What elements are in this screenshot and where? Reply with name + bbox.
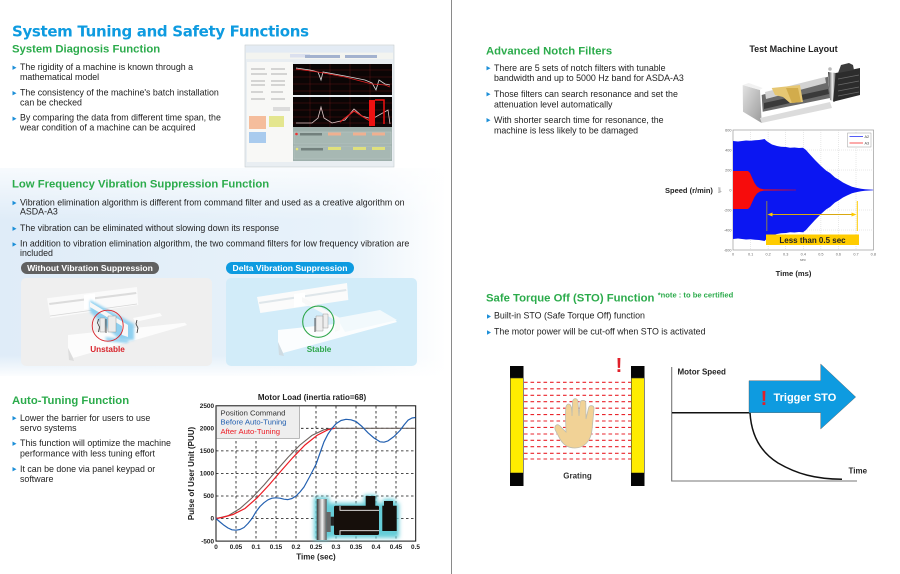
x axis labels: 0 <box>214 544 218 551</box>
note: to be certified: *note : to be certified <box>658 291 734 300</box>
y axis title: speed: Speed (r/min) <box>665 186 713 195</box>
chart legend: A3 <box>864 142 869 146</box>
x axis title: Time (sec) <box>296 552 336 562</box>
software screenshot <box>245 45 394 167</box>
left post <box>510 366 524 486</box>
warning mark: ! <box>616 355 622 377</box>
x axis labels: 0.1 <box>252 544 261 551</box>
label: motor speed: Motor Speed <box>678 368 726 376</box>
label: stable: Stable <box>307 345 332 354</box>
x axis labels: 0.05 <box>230 544 243 551</box>
speed line <box>672 413 842 479</box>
chart legend <box>848 133 871 147</box>
line chart: speed response <box>718 128 876 262</box>
chart: motor speed after sto <box>672 364 868 481</box>
bullet list: notch filters: With shorter search time for resonance, the <box>494 115 664 125</box>
y axis labels: -500 <box>201 538 214 545</box>
chart x axis labels: 0.6 <box>836 252 841 256</box>
bullet list: sto: Built-in STO (Safe Torque Off) function <box>494 311 645 321</box>
y axis labels: 1500 <box>200 448 214 455</box>
panel: system diagnosis <box>12 44 394 167</box>
label: grating: Grating <box>563 472 592 480</box>
bullet list: low frequency: The vibration can be eliminated without slowing down its response <box>20 223 279 233</box>
heading: auto-tuning: Auto-Tuning Function <box>12 395 129 407</box>
light beams <box>524 382 631 459</box>
chart y axis labels <box>724 128 732 252</box>
label: without vibration suppression: Without Vibration Suppression <box>27 263 153 273</box>
icon: hand <box>555 399 594 448</box>
callout: settling time arrow <box>767 201 857 231</box>
bullet list: notch filters: Those filters can search resonance and set the <box>494 89 678 99</box>
diagram: grating <box>510 355 644 486</box>
bullet list: sto <box>487 311 706 337</box>
x axis labels: 0.25 <box>310 544 323 551</box>
chart title: Motor Load (inertia ratio=68) <box>258 393 366 402</box>
x axis labels: 0.45 <box>390 544 403 551</box>
label: unstable: Unstable <box>90 345 125 354</box>
chart x axis labels: sec <box>800 258 806 262</box>
chart x axis labels: rpm <box>718 187 722 193</box>
screenshot status panel <box>293 127 392 161</box>
waveform: A2 <box>733 139 873 241</box>
bullet list: auto-tuning: servo systems <box>20 423 77 433</box>
chart x axis labels: 0.3 <box>783 252 788 256</box>
screenshot chart: phase <box>293 97 392 127</box>
bullet list: low frequency <box>12 197 409 258</box>
bullet list: auto-tuning: performance with less tuning effort <box>20 448 156 458</box>
label: delta vibration suppression: Delta Vibration Suppression <box>233 263 347 273</box>
bullet list: low frequency: included <box>20 248 53 258</box>
chart legend: Position Command <box>220 408 285 418</box>
y axis labels: 1000 <box>200 471 214 478</box>
chart x axis labels: 0 <box>732 252 734 256</box>
chart x axis labels <box>718 187 876 262</box>
bullet list: system diagnosis: wear condition of a machine can be acquired <box>19 123 196 133</box>
y axis labels: 500 <box>203 493 214 500</box>
title: System Tuning and Safety Functions <box>12 22 309 40</box>
arrow: trigger sto: Trigger STO <box>774 392 837 404</box>
chart x axis labels: 0.8 <box>871 252 876 256</box>
y axis labels <box>200 403 214 545</box>
arrow: trigger sto <box>749 364 856 429</box>
bullet list: low frequency: In addition to vibration elimination algorithm, the two command filters for low frequency vibration are <box>20 239 409 249</box>
bullet list: system diagnosis: mathematical model <box>20 72 99 82</box>
bullet list: notch filters: machine is less likely to be damaged <box>494 126 638 136</box>
bullet list: low frequency: ASDA-A3 <box>20 207 58 217</box>
chart x axis labels: 0.2 <box>765 252 771 256</box>
bullet list: system diagnosis: The consistency of the machine's batch installation <box>20 87 219 97</box>
y axis labels: 2000 <box>200 426 214 432</box>
chart y axis labels: -200 <box>724 208 732 212</box>
bullet list: auto-tuning: This function will optimize the machine <box>20 438 171 448</box>
icon: servo motor <box>314 495 399 540</box>
heading: system diagnosis: System Diagnosis Function <box>12 44 160 56</box>
heading: safe torque off: Safe Torque Off (STO) Function <box>486 293 654 305</box>
bullet list: auto-tuning: Lower the barrier for users to use <box>20 413 150 423</box>
right post <box>631 366 644 486</box>
heading: advanced notch filters: Advanced Notch Filters <box>486 46 612 58</box>
bullet list: low frequency: Vibration elimination algorithm is different from command filter and used as a creative algorithm on <box>20 197 405 207</box>
chart legend: After Auto-Tuning <box>220 427 280 436</box>
chart y axis labels: 400 <box>725 148 732 152</box>
bullet list: system diagnosis: can be checked <box>20 97 82 107</box>
bullet list: notch filters: attenuation level automatically <box>494 100 613 110</box>
x axis labels: 0.3 <box>332 544 341 551</box>
circle: unstable highlight <box>92 310 123 341</box>
waveform: A3 <box>733 171 796 209</box>
bullet list: auto-tuning <box>12 413 171 484</box>
bullet list: system diagnosis: By comparing the data from different time span, the <box>20 113 221 123</box>
chart y axis labels: 200 <box>725 168 732 172</box>
bullet list: system diagnosis: The rigidity of a machine is known through a <box>20 62 193 72</box>
arrow: trigger sto: ! <box>761 388 767 410</box>
curve: after auto-tuning <box>216 428 335 518</box>
panel: stable machine <box>226 278 417 366</box>
chart y axis labels: 0 <box>729 188 732 192</box>
curve: position command <box>216 428 416 518</box>
x axis labels: 0.5 <box>411 544 420 551</box>
x axis labels: 0.35 <box>350 544 363 551</box>
y axis labels: 2500 <box>200 403 214 410</box>
panel: safe torque off <box>486 291 868 486</box>
heading: test machine layout: Test Machine Layout <box>749 44 838 54</box>
x axis labels <box>214 544 420 551</box>
chart x axis labels: 0.1 <box>748 252 753 256</box>
chart y axis labels: -600 <box>724 248 732 252</box>
page divider <box>450 0 452 574</box>
chart x axis labels: 0.5 <box>818 252 824 256</box>
illustration: test machine <box>743 63 860 123</box>
bullet list: system diagnosis <box>12 62 221 133</box>
chart x axis labels: 0.7 <box>853 252 859 256</box>
x axis labels: 0.4 <box>372 544 381 551</box>
circle: stable highlight <box>303 306 334 337</box>
machine illustration: unstable <box>47 287 187 361</box>
y axis labels: 0 <box>210 516 214 523</box>
panel: unstable machine <box>21 278 212 366</box>
x axis title: time: Time (ms) <box>776 269 812 278</box>
panel: auto-tuning <box>12 393 420 562</box>
panel: advanced notch filters <box>486 44 876 278</box>
bullet list: sto: The motor power will be cut-off when STO is activated <box>494 327 706 337</box>
chart legend: A2 <box>864 135 869 139</box>
callout: less than 0.5 sec: Less than 0.5 sec <box>779 236 846 245</box>
screenshot chart: magnitude <box>293 64 392 95</box>
y axis title: Pulse of User Unit (PUU) <box>187 426 196 520</box>
curve: before auto-tuning <box>216 418 416 530</box>
panel: low frequency vibration suppression <box>12 179 417 366</box>
callout: less than 0.5 sec <box>766 234 859 245</box>
heading: low frequency: Low Frequency Vibration Suppression Function <box>12 179 269 191</box>
chart legend <box>216 406 300 438</box>
bullet list: auto-tuning: software <box>20 474 54 484</box>
bullet list: notch filters: bandwidth and up to 5000 Hz band for ASDA-A3 <box>494 73 684 83</box>
chart x axis labels: 0.4 <box>801 252 806 256</box>
chart legend: Before Auto-Tuning <box>220 418 286 426</box>
machine illustration: stable <box>257 283 397 356</box>
chart y axis labels: -400 <box>724 228 732 232</box>
label: time: Time <box>848 466 868 476</box>
x axis labels: 0.2 <box>292 544 301 551</box>
bullet list: auto-tuning: It can be done via panel keypad or <box>20 464 155 474</box>
panel background: low frequency section <box>0 168 446 376</box>
x axis labels: 0.15 <box>270 544 283 551</box>
line chart: motor load <box>187 393 420 562</box>
chart y axis labels: 600 <box>725 128 732 132</box>
bullet list: notch filters: There are 5 sets of notch filters with tunable <box>494 63 666 73</box>
bullet list: notch filters <box>486 63 684 136</box>
